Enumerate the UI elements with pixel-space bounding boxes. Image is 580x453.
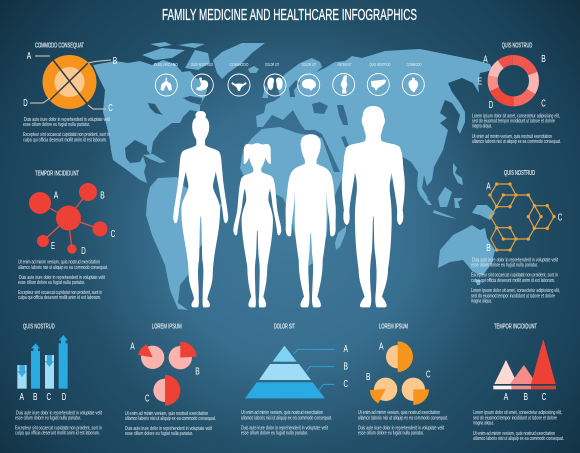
text block: magna aliqua. xyxy=(471,298,492,304)
icon: brain xyxy=(298,62,320,96)
heading: TEMPOR INCIDIDUNT xyxy=(35,168,79,178)
icon: stomach xyxy=(191,62,213,96)
pie charts xyxy=(366,340,431,405)
panel: tempor incididunt network xyxy=(18,168,115,301)
pyramid chart: B xyxy=(343,360,348,372)
panel: lorem ipsum red pies xyxy=(125,322,216,437)
text block: esse cillum dolore eu fugiat nulla pariatur. xyxy=(18,280,85,286)
icon: uterus xyxy=(228,62,250,96)
ring chart: B xyxy=(541,53,546,65)
text block: ullamco laboris nisi ut aliquip ex ea commodo consequat. xyxy=(358,416,448,422)
South America xyxy=(146,177,222,310)
text block xyxy=(18,260,108,301)
bar chart with arrows: D xyxy=(62,391,66,403)
text block: esse cillum dolore eu fugiat nulla pariatur. xyxy=(358,430,424,436)
human figures xyxy=(173,106,405,307)
Africa xyxy=(240,127,345,268)
Southeast Asian islands xyxy=(417,163,495,220)
text block: Duis aute irure dolor in reprehenderit in voluptate velit xyxy=(19,275,105,281)
Arctic islands xyxy=(142,42,210,70)
icon: knee xyxy=(333,62,355,96)
pie charts: C xyxy=(145,392,150,404)
text block xyxy=(23,117,110,144)
text block xyxy=(471,258,560,304)
text block: Ut enim ad minim veniam, quis nostrud exercitation xyxy=(125,411,208,417)
pie charts xyxy=(130,340,200,406)
ring chart xyxy=(478,53,546,111)
hexagon diagram: C xyxy=(558,212,562,224)
icon: heart: COMMODO xyxy=(406,62,422,67)
UK xyxy=(262,85,268,98)
icon: lungs: DUIS ARCANO xyxy=(154,62,178,67)
icon: liver: QUIS NOSTRUD xyxy=(370,62,391,67)
icon: stomach: DUIS NOSTRUD xyxy=(191,62,213,67)
Greenland xyxy=(213,43,265,79)
panel: quis nostrud bars xyxy=(15,322,102,436)
text block: Duis aute irure dolor in reprehenderit in voluptate velit xyxy=(24,117,110,123)
pie charts: B xyxy=(366,371,371,383)
heading: QUIS NOSTRUD xyxy=(504,168,535,177)
heading: TEMPOR INCIDIDUNT xyxy=(494,322,537,331)
bar chart with arrows xyxy=(17,335,68,403)
text block xyxy=(358,410,448,436)
heading: LOREM IPSUM xyxy=(152,322,182,331)
text block: Excepteur sint occaecat cupidatat non proident, sunt in xyxy=(15,426,102,432)
bar chart with arrows: A xyxy=(19,391,24,403)
text block: ullamco laboris nisi ut aliquip ex ea commodo consequat. xyxy=(125,416,216,422)
text block: Duis aute irure dolor in reprehenderit in voluptate velit xyxy=(358,426,444,432)
figure: boy xyxy=(286,134,336,307)
text block: culpa qui officia deserunt mollit anim id est laborum. xyxy=(18,295,101,301)
text block: Duis aute irure dolor in reprehenderit in voluptate velit xyxy=(16,410,102,416)
icon: brain: DOLOR SIT xyxy=(302,62,316,67)
Iceland xyxy=(248,66,259,73)
text block: Ut enim ad minim veniam, quis nostrud exercitation xyxy=(241,410,323,416)
pie charts: A xyxy=(130,340,135,352)
heading: QUIS NOSTRUD xyxy=(23,322,55,331)
text block: magna aliqua. xyxy=(472,124,492,130)
text block: culpa qui officia deserunt mollit anim id est laborum. xyxy=(23,138,107,144)
heading: COMMODO CONSEQUAT xyxy=(35,40,84,50)
heading: LOREM IPSUM xyxy=(379,322,408,331)
orange donut chart: C xyxy=(108,102,113,114)
panel: commodo consequat xyxy=(23,40,117,144)
text block: Excepteur sint occaecat cupidatat non proident, sunt in xyxy=(18,290,102,296)
network diagram: B xyxy=(100,190,105,202)
text block xyxy=(15,410,102,436)
North and Central America xyxy=(93,60,207,183)
text block: esse cillum dolore eu fugiat nulla pariatur. xyxy=(241,430,308,436)
figure: girl xyxy=(233,143,281,307)
orange donut chart: B xyxy=(113,55,117,67)
ring chart: C xyxy=(541,98,546,110)
text block: ullamco laboris nisi ut aliquip ex ea commodo consequat. xyxy=(18,265,108,271)
network diagram: C xyxy=(111,228,115,240)
text block xyxy=(473,410,564,442)
orange donut chart: A xyxy=(27,50,31,62)
Eurasia xyxy=(256,49,493,199)
text block: Duis aute irure dolor in reprehenderit in voluptate velit xyxy=(241,426,328,432)
network diagram: E xyxy=(51,240,55,252)
ring chart: E xyxy=(478,76,482,88)
network diagram: D xyxy=(81,245,86,257)
text block: Ut enim ad minim veniam, quis nostrud exercitation xyxy=(358,410,440,416)
bar chart with arrows: C xyxy=(46,391,51,403)
text block: ullamco laboris nisi ut aliquip ex ea commodo consequat. xyxy=(241,416,332,422)
panel: tempor incididunt peaks xyxy=(473,322,564,442)
Australia xyxy=(438,225,495,285)
organ icon row xyxy=(154,62,424,96)
heading: DOLOR SIT xyxy=(274,322,295,331)
orange donut chart: D xyxy=(23,97,28,109)
triangle peak chart xyxy=(493,339,556,403)
text block: culpa qui officia deserunt mollit anim id est laborum. xyxy=(15,430,100,436)
pie charts: C xyxy=(426,368,431,380)
title: FAMILY MEDICINE AND HEALTHCARE INFOGRAPHICS xyxy=(162,7,417,24)
panel: lorem ipsum orange pies xyxy=(358,322,448,436)
text block xyxy=(472,114,561,145)
world map xyxy=(93,42,495,310)
network diagram xyxy=(29,183,115,257)
icon: knee: ANTEM SIT xyxy=(338,62,352,67)
icon: heart xyxy=(402,62,424,96)
text block: esse cillum dolore eu fugiat nulla pariatur. xyxy=(125,431,193,437)
text block xyxy=(241,410,332,436)
Cuba xyxy=(143,154,166,163)
icon: kidneys xyxy=(264,62,286,96)
triangle peak chart: C xyxy=(542,391,546,403)
text block: Ut enim ad minim veniam, quis nostrud exercitation xyxy=(18,260,100,266)
icon: kidneys: DOLOR SIT xyxy=(265,62,279,67)
hexagon diagram: A xyxy=(486,180,491,192)
figure: man xyxy=(342,106,405,307)
triangle peak chart: B xyxy=(523,391,528,403)
Madagascar xyxy=(335,226,346,250)
panel: quis nostrud ring xyxy=(472,40,561,145)
text block: esse cillum dolore eu fugiat nulla pariatur. xyxy=(15,416,81,422)
pyramid chart xyxy=(245,343,348,398)
pie charts: B xyxy=(195,366,200,378)
icon: uterus: COMMODO xyxy=(230,62,249,67)
icon: lungs xyxy=(154,62,178,96)
heading: QUIS NOSTRUD xyxy=(502,40,532,50)
pyramid chart: A xyxy=(343,343,348,355)
text block: Duis aute irure dolor in reprehenderit in voluptate velit xyxy=(125,426,212,432)
pie charts: A xyxy=(379,340,384,352)
ring chart: D xyxy=(489,99,493,111)
triangle peak chart: A xyxy=(504,391,508,403)
pyramid chart: C xyxy=(343,378,348,390)
ring chart: A xyxy=(483,54,488,66)
text block xyxy=(125,411,216,437)
text block: magna aliqua. xyxy=(473,420,494,426)
hexagon diagram: B xyxy=(486,242,491,254)
text block: esse cillum dolore eu fugiat nulla pariatur. xyxy=(23,122,90,128)
panel: quis nostrud hexagons xyxy=(471,168,562,304)
figure: woman xyxy=(173,111,228,307)
hexagon diagram xyxy=(486,180,562,254)
text block: Excepteur sint occaecat cupidatat non proident, sunt in xyxy=(23,132,110,138)
network diagram: A xyxy=(54,190,58,202)
orange donut chart xyxy=(23,50,117,114)
panel: dolor sit pyramid xyxy=(241,322,348,436)
text block: esse cillum dolore eu fugiat nulla pariatur. xyxy=(471,262,538,268)
bar chart with arrows: B xyxy=(33,391,38,403)
icon: liver xyxy=(367,62,391,96)
